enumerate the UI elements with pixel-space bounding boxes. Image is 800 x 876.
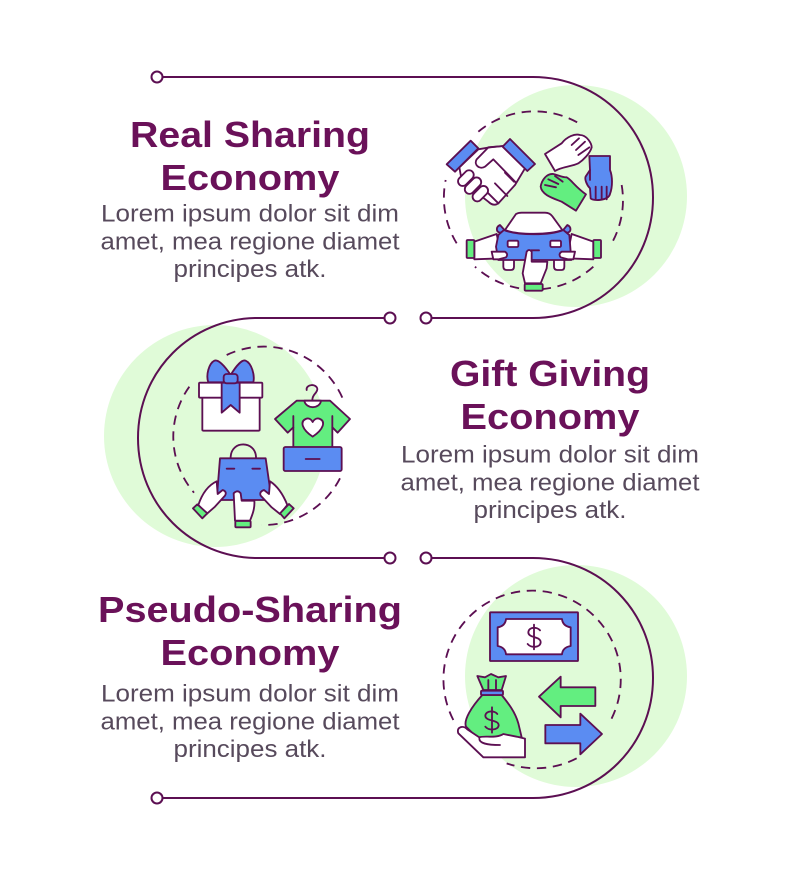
connector bottom node [384, 552, 396, 564]
icons: giving [173, 347, 350, 527]
connector start node [152, 72, 162, 82]
icons: sharing [444, 111, 623, 291]
heading [98, 589, 402, 673]
description: Lorem ipsum dolor sit dim [101, 200, 399, 228]
icon: t-shirt on hanger in box [275, 385, 350, 471]
heading [450, 353, 650, 437]
description [100, 200, 400, 283]
icon: right arrow [545, 714, 602, 754]
icon: banknote [490, 612, 578, 661]
background circle [465, 85, 687, 307]
description: amet, mea regione diamet [100, 228, 400, 256]
icon: left arrow [539, 677, 595, 717]
connector line [163, 77, 653, 318]
panel: pseudo-sharing economy [98, 552, 687, 804]
icon: handshake [447, 139, 535, 205]
connector line [163, 558, 653, 798]
connector end node [420, 312, 432, 324]
description: principes atk. [174, 256, 326, 283]
description [100, 680, 400, 763]
description: Lorem ipsum dolor sit dim [401, 442, 699, 468]
heading: Pseudo-Sharing [98, 589, 402, 630]
heading [130, 114, 370, 198]
heading: Economy [460, 396, 640, 437]
icon: money bag on hand [458, 674, 525, 757]
icon: hands in circle [541, 135, 612, 211]
description: principes atk. [174, 736, 326, 763]
description: principes atk. [474, 497, 626, 524]
panel: real sharing economy [100, 72, 687, 324]
description: amet, mea regione diamet [400, 470, 700, 496]
background circle [104, 325, 326, 547]
icon: shared car [467, 213, 601, 291]
heading: Gift Giving [450, 353, 650, 394]
heading: Economy [160, 632, 340, 673]
description: amet, mea regione diamet [100, 708, 400, 736]
description: Lorem ipsum dolor sit dim [101, 680, 399, 708]
icon: shopping bag held by hands [193, 444, 294, 527]
background circle [465, 565, 687, 787]
heading: Economy [160, 157, 340, 198]
connector end node [152, 792, 162, 804]
connector line [138, 318, 384, 558]
connector start node [420, 552, 432, 564]
description [400, 442, 700, 524]
icons: money [443, 591, 621, 768]
panel: gift giving economy [104, 312, 700, 564]
heading: Real Sharing [130, 114, 370, 155]
icon: gift box [199, 360, 262, 431]
connector top node [384, 312, 396, 324]
